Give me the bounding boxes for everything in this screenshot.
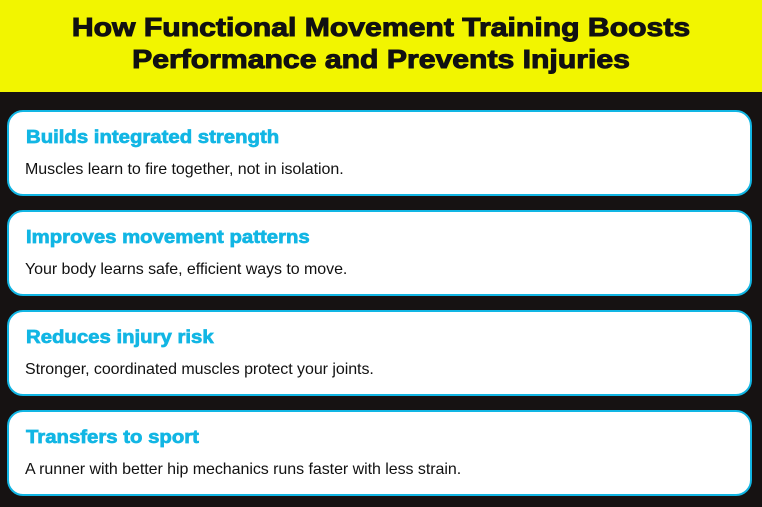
card: builds integrated strength bbox=[7, 110, 752, 196]
text: A runner with better hip mechanics runs faster with less strain. bbox=[25, 461, 461, 478]
text: Stronger, coordinated muscles protect your joints. bbox=[25, 361, 374, 378]
title: Performance and Prevents Injuries bbox=[132, 44, 630, 74]
title: How Functional Movement Training Boosts bbox=[72, 12, 690, 42]
card: reduces injury risk bbox=[7, 310, 752, 396]
heading: Transfers to sport bbox=[26, 427, 199, 447]
card: transfers to sport bbox=[7, 410, 752, 496]
heading: Reduces injury risk bbox=[26, 327, 214, 347]
heading: Builds integrated strength bbox=[26, 127, 279, 147]
title bbox=[0, 0, 762, 92]
text: Muscles learn to fire together, not in isolation. bbox=[25, 161, 344, 178]
text: Your body learns safe, efficient ways to move. bbox=[25, 261, 347, 278]
heading: Improves movement patterns bbox=[26, 227, 310, 247]
card: improves movement patterns bbox=[7, 210, 752, 296]
